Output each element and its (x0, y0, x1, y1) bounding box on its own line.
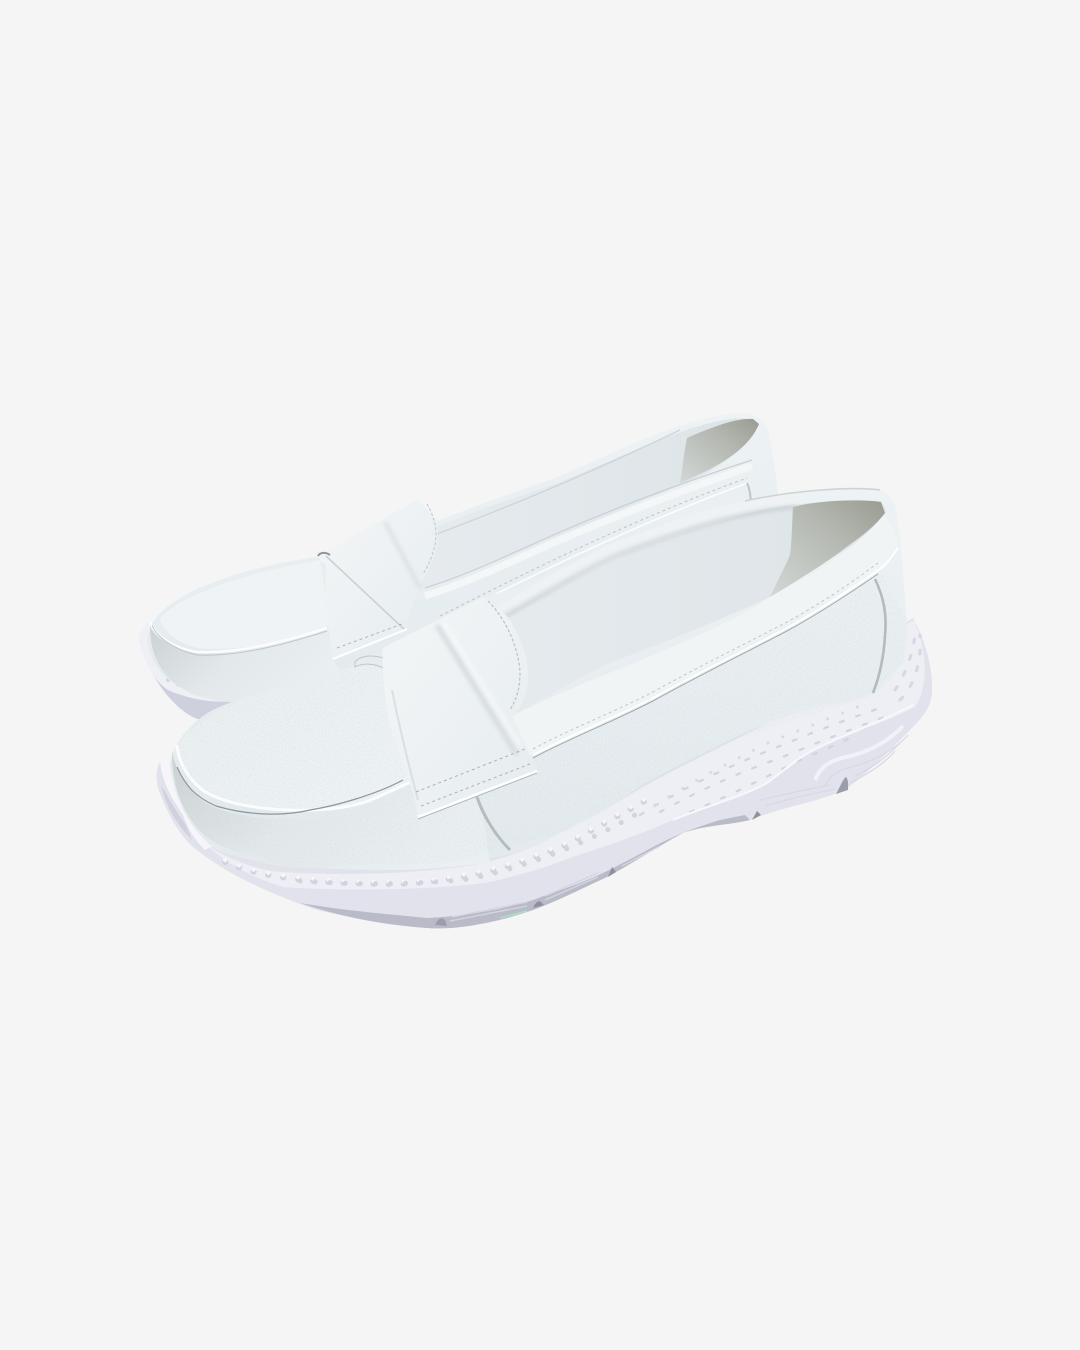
front shoe lateral seam (477, 797, 510, 850)
front shoe leather grain (170, 570, 907, 867)
front shoe opening (483, 501, 885, 725)
front shoe strap (383, 597, 537, 817)
back shoe upper body (147, 414, 779, 704)
front shoe collar lip (485, 499, 795, 618)
front shoe heel patch dots (640, 630, 920, 815)
front shoe heel lining (770, 500, 885, 597)
back shoe toe seam (150, 621, 327, 652)
back shoe vamp highlight (160, 560, 330, 649)
front shoe strap stitching (421, 764, 530, 806)
front shoe heel swoosh (815, 726, 903, 780)
front shoe sole base (157, 618, 932, 928)
back shoe heel seam (747, 483, 751, 510)
front shoe upper body (170, 488, 907, 868)
front shoe (157, 488, 932, 928)
back shoe collar lip (425, 466, 752, 596)
front shoe sole ridge and heel patch (200, 620, 925, 889)
front shoe heel seam (873, 579, 886, 693)
front shoe vamp (178, 662, 413, 810)
front shoe sole inner ridge line (673, 705, 913, 820)
back shoe heel lining (680, 419, 759, 483)
front shoe inner side wall (490, 514, 898, 770)
front shoe strap crease (437, 625, 517, 755)
front shoe toe band (172, 750, 490, 870)
back shoe (138, 414, 779, 722)
back shoe strap (317, 500, 438, 660)
front shoe stitch line (533, 548, 898, 755)
front shoe toe seam (177, 745, 413, 810)
front shoe tread (300, 815, 750, 928)
back shoe sole (140, 625, 268, 722)
front shoe tread notches (836, 777, 848, 794)
front shoe tread ribs (450, 846, 660, 921)
front shoe strap loop (355, 656, 392, 672)
front shoe toe side shadow (161, 785, 192, 840)
back shoe opening (415, 418, 759, 590)
back shoe toe band (150, 626, 350, 701)
front shoe sole ridge dots (225, 793, 655, 884)
front shoe toe rim (160, 759, 215, 850)
